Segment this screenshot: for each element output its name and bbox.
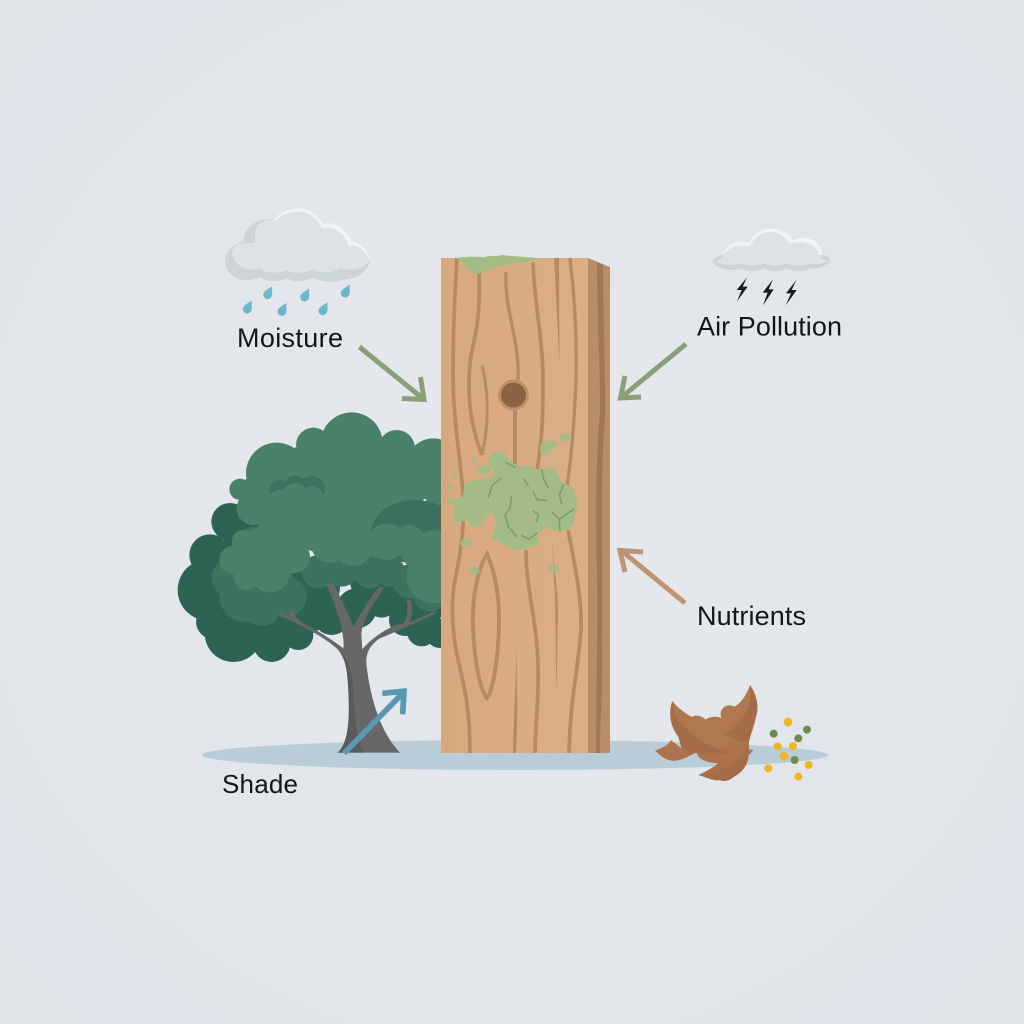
label: Nutrients: Nutrients xyxy=(697,601,806,631)
illustration: rain cloud xyxy=(225,208,370,317)
wooden post xyxy=(441,255,610,753)
illustration: pollution cloud xyxy=(713,229,830,305)
cloud body xyxy=(717,232,830,266)
leaf shading lower xyxy=(698,742,749,781)
leaf shading right xyxy=(723,685,757,743)
arrow: moisture xyxy=(360,347,424,400)
ground shadow xyxy=(202,740,828,770)
cloud shadow xyxy=(713,255,830,271)
cloud body xyxy=(232,212,369,273)
cloud shadow xyxy=(225,219,370,282)
label: Air Pollution: Air Pollution xyxy=(697,312,842,342)
moss lobes xyxy=(454,451,577,550)
post front face xyxy=(441,258,588,753)
cloud highlight xyxy=(273,208,370,267)
arrow: shade xyxy=(344,691,404,753)
tree canopy: shaded dome xyxy=(372,500,458,563)
post side face xyxy=(588,258,610,753)
tree canopy: middle layer xyxy=(212,520,447,626)
moss patch: main xyxy=(447,433,577,574)
tree canopy: light left cluster xyxy=(219,527,310,592)
post wood grain xyxy=(452,258,581,753)
post knot hole xyxy=(498,380,529,410)
label: Shade: Shade xyxy=(222,769,298,799)
tree canopy: leaf arcs xyxy=(269,475,325,503)
post knot: oval loop xyxy=(473,554,499,698)
moss specks xyxy=(447,433,571,574)
nutrient dots xyxy=(764,718,813,781)
leaf pile body xyxy=(655,685,757,781)
illustration: tree xyxy=(178,412,463,753)
tree canopy: dark back layer xyxy=(178,503,455,662)
leaf shading xyxy=(670,701,733,755)
arrow: nutrients xyxy=(620,550,685,603)
post tapered grain streaks xyxy=(513,258,560,753)
tree canopy: light upper layer xyxy=(229,412,463,566)
label: Moisture: Moisture xyxy=(237,323,343,353)
illustration: fallen leaves xyxy=(655,685,813,781)
post side grain xyxy=(596,262,605,753)
rain drops xyxy=(241,283,354,317)
tree canopy: light right cluster xyxy=(368,523,460,603)
tree trunk and branches xyxy=(277,583,436,753)
leaf lobes xyxy=(687,705,738,750)
arrow: air pollution xyxy=(620,344,686,398)
tree canopy: leaf arc highlight xyxy=(269,483,327,540)
moss patch: top of post xyxy=(456,255,538,274)
lightning bolts xyxy=(737,277,797,305)
moss cracks xyxy=(488,463,573,539)
cloud highlight xyxy=(723,229,822,262)
